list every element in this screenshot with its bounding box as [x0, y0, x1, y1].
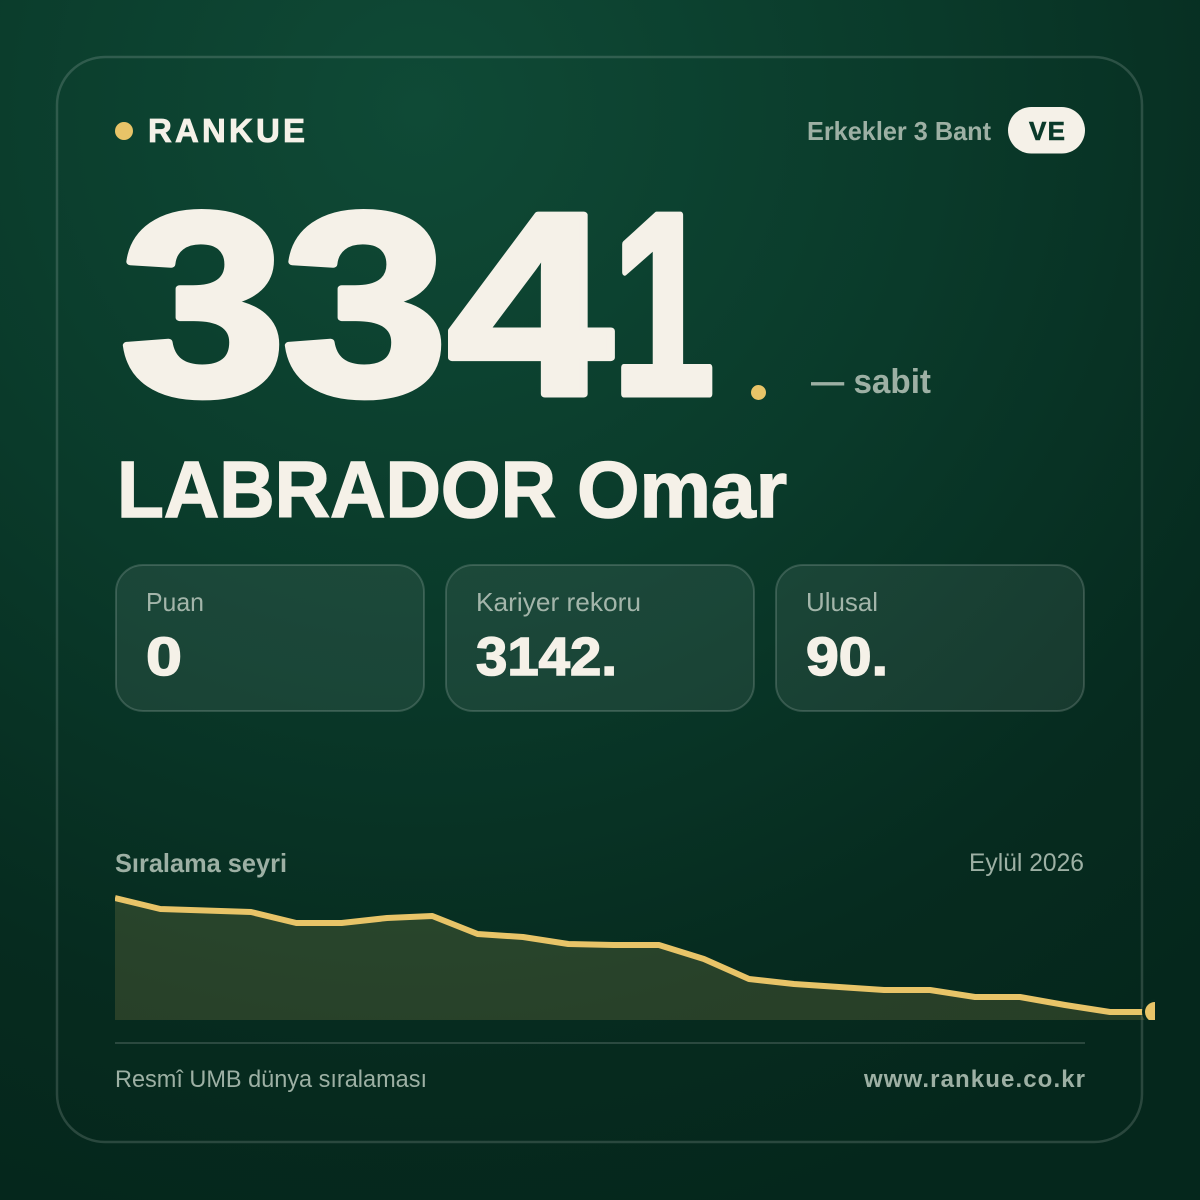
category and country badge — [807, 107, 1085, 154]
player name — [117, 445, 787, 534]
country badge: VE — [1029, 116, 1065, 146]
chart title: Sıralama seyri — [115, 848, 287, 878]
chart line — [115, 898, 1155, 1012]
world rank number: 3 — [282, 160, 448, 450]
stat card: points — [116, 565, 424, 711]
stat card: career best — [446, 565, 754, 711]
stat card: points: Puan — [146, 587, 204, 617]
stat card: national: Ulusal — [806, 587, 878, 617]
stat card: career best: 3142. — [476, 627, 617, 687]
country badge — [1008, 107, 1085, 154]
world rank number: 3 — [120, 160, 286, 450]
stat card: national: 90. — [806, 627, 888, 687]
brand header — [115, 112, 305, 149]
stat card: national — [776, 565, 1084, 711]
current rank marker — [1142, 1002, 1155, 1020]
world rank number — [120, 160, 715, 450]
world rank number: 4 — [448, 160, 614, 450]
world rank number: 1 — [612, 160, 715, 450]
rank period dot — [751, 385, 766, 400]
footer website: www.rankue.co.kr — [863, 1066, 1085, 1093]
icon: brand dot — [115, 122, 133, 140]
ranking area chart — [115, 898, 1166, 1024]
chart date: Eylül 2026 — [969, 849, 1084, 877]
rank change: — sabit — [811, 363, 931, 401]
chart area fill — [115, 898, 1155, 1020]
player name: Omar — [577, 445, 787, 534]
stat card: career best: Kariyer rekoru — [476, 587, 641, 617]
category label: Erkekler 3 Bant — [807, 116, 991, 146]
player name: LABRADOR — [117, 445, 556, 534]
stat card: points: 0 — [146, 627, 182, 687]
brand name: RANKUE — [148, 112, 305, 149]
footer source: Resmî UMB dünya sıralaması — [115, 1066, 427, 1093]
